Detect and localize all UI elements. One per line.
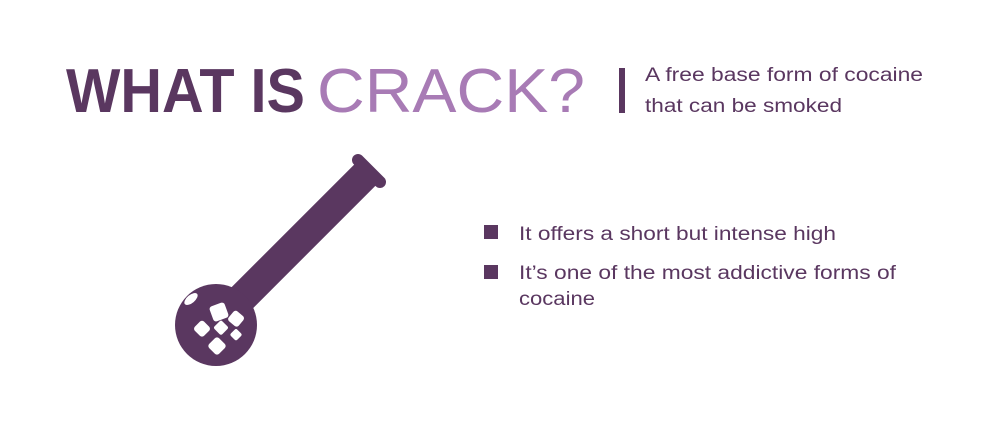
subtitle: that can be smoked — [645, 96, 842, 117]
bullet 2: It’s one of the most addictive forms of — [519, 263, 897, 284]
subtitle: A free base form of cocaine — [645, 65, 923, 86]
title: WHAT IS — [66, 57, 305, 126]
title — [66, 57, 585, 126]
title: CRACK? — [317, 57, 585, 126]
bullet 2: cocaine — [519, 289, 595, 310]
bullet 1: It offers a short but intense high — [519, 224, 836, 245]
bullet 2 — [484, 263, 897, 310]
icon: crack pipe — [175, 160, 380, 366]
subtitle — [645, 65, 923, 117]
divider bar — [619, 68, 625, 113]
